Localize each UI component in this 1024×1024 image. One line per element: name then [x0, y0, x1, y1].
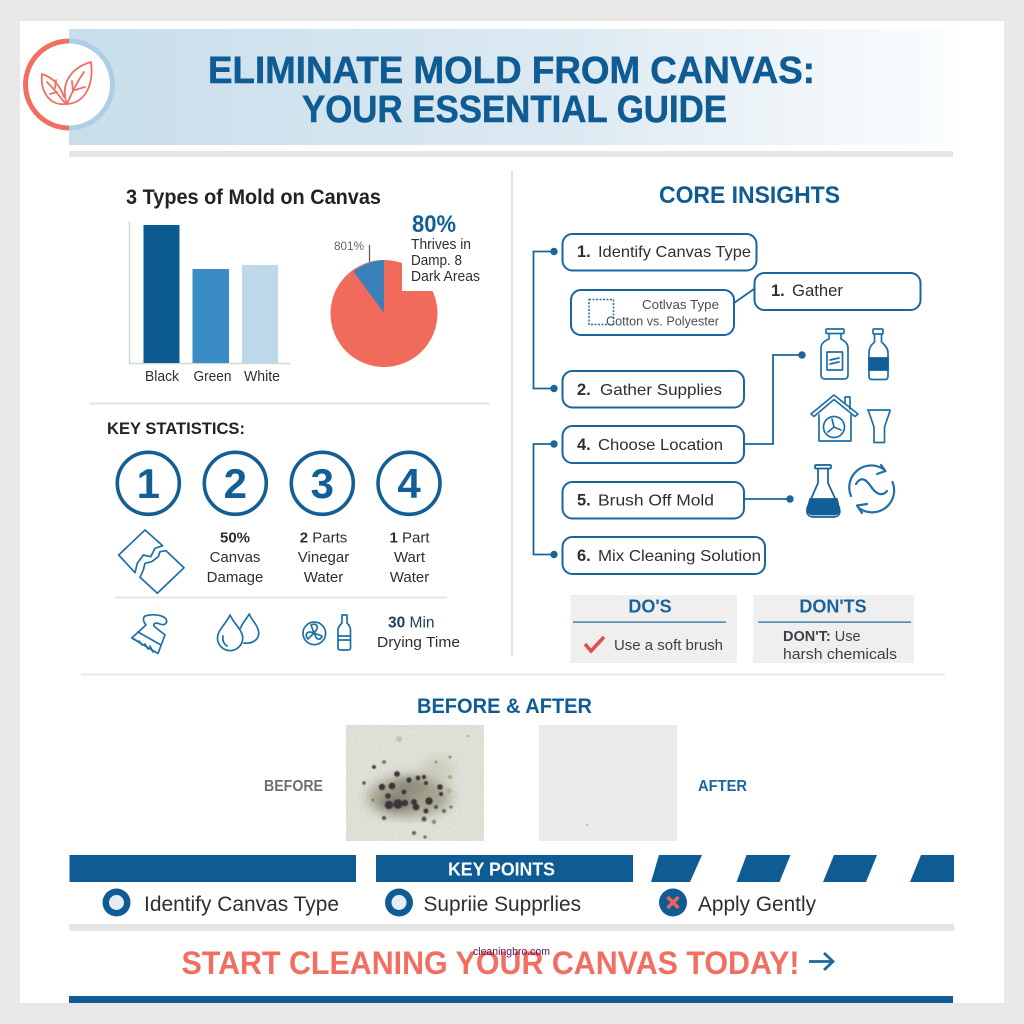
- heading: key statistics: KEY STATISTICS:: [107, 420, 245, 438]
- stat: water: Water: [390, 569, 429, 586]
- pie callout: Damp. 8: [411, 253, 462, 269]
- connector: steps 1 to 2: [534, 249, 557, 391]
- icon: recycle: [849, 465, 894, 513]
- step 2: [562, 371, 744, 408]
- stat: water: Wart: [394, 549, 426, 566]
- step 5: Brush Off Mold: [598, 492, 714, 510]
- stat: vinegar: 2 Parts: [300, 530, 347, 546]
- heading: core insights: CORE INSIGHTS: [659, 182, 840, 209]
- numbered circles: 1: [137, 460, 160, 507]
- step 5: 5.: [577, 492, 591, 510]
- canvas type sub-box: Cotlvas Type: [642, 298, 719, 312]
- key point: identify: Identify Canvas Type: [144, 893, 339, 916]
- stat: canvas damage: 50%: [220, 530, 250, 546]
- pie callout: Thrives in: [411, 237, 471, 253]
- icon: water drops: [218, 614, 259, 651]
- key point: apply gently: [659, 888, 816, 916]
- heading: mold types: 3 Types of Mold on Canvas: [126, 186, 381, 209]
- icon: jar: [821, 329, 848, 379]
- key points banner: [70, 855, 954, 882]
- call to action: START CLEANING YOUR CANVAS TODAY!: [182, 945, 800, 981]
- stat: water: 1 Part: [389, 530, 430, 546]
- stat: vinegar: [298, 530, 349, 586]
- watermark: cleaningbro.com: [473, 946, 550, 958]
- photo: moldy canvas: [346, 725, 484, 841]
- gather box: 1.: [771, 282, 785, 300]
- pie chart: 801%: [334, 241, 364, 253]
- icon: flask: [807, 465, 840, 517]
- stat: drying time: 30 Min: [388, 614, 435, 632]
- title: YOUR ESSENTIAL GUIDE: [302, 89, 727, 131]
- title: [208, 50, 815, 131]
- canvas type sub-box: Cotton vs. Polyester: [606, 314, 719, 328]
- numbered circles: 2: [224, 460, 247, 507]
- icon: bottle: [869, 329, 888, 380]
- step 4: Choose Location: [598, 437, 723, 454]
- key point: identify: [102, 888, 339, 916]
- panel: don'ts: DON'T: Use: [783, 629, 861, 645]
- panel: do's: [570, 595, 737, 663]
- bar chart: Black: [145, 369, 180, 385]
- step 6: 6.: [577, 547, 591, 565]
- bar chart: [130, 222, 290, 385]
- numbered circles: [117, 452, 440, 514]
- connector: sub-box to gather: [734, 289, 754, 303]
- key point: supplies: [385, 888, 581, 916]
- bottom bar: [69, 996, 953, 1003]
- icon: torn canvas: [119, 530, 184, 593]
- step 1: 1.: [577, 243, 591, 261]
- step 1: [562, 234, 756, 270]
- gather box: [754, 273, 920, 310]
- panel: don'ts: harsh chemicals: [783, 647, 897, 663]
- panel: don'ts: DON'TS: [799, 596, 867, 616]
- label: after: AFTER: [698, 778, 747, 795]
- icon: arrow: [809, 953, 833, 970]
- stat: vinegar: Vinegar: [298, 549, 349, 566]
- step 6: [562, 537, 765, 574]
- stat: vinegar: Water: [304, 569, 343, 586]
- icon: brush: [132, 615, 167, 654]
- step 4: [562, 426, 744, 463]
- connector: brush to flask: [744, 496, 793, 502]
- heading: before and after: BEFORE & AFTER: [417, 695, 592, 718]
- stat: drying time: [377, 614, 460, 651]
- connector: steps 4 to 6: [534, 441, 557, 557]
- icon: funnel: [868, 410, 890, 442]
- step 2: 2.: [577, 381, 591, 399]
- photo: clean canvas: [539, 725, 677, 841]
- bar chart: White: [244, 369, 280, 385]
- icon: leaf logo: [26, 41, 112, 128]
- stat: water: [389, 530, 430, 586]
- numbered circles: 4: [397, 460, 421, 507]
- gather box: Gather: [792, 282, 844, 300]
- key points banner: KEY POINTS: [448, 860, 555, 880]
- icon: fan and bottle: [303, 615, 350, 650]
- pie callout: [411, 211, 480, 285]
- step 1: Identify Canvas Type: [598, 244, 751, 261]
- step 4: 4.: [577, 436, 591, 454]
- title: ELIMINATE MOLD FROM CANVAS:: [208, 50, 815, 92]
- numbered circles: 3: [311, 460, 334, 507]
- step 2: Gather Supplies: [600, 382, 722, 399]
- canvas type sub-box: [571, 290, 734, 335]
- icon: check mark: [585, 637, 604, 651]
- pie callout: Dark Areas: [411, 269, 480, 285]
- header banner: [69, 29, 953, 157]
- connector: location to supplies: [744, 352, 805, 444]
- pie callout: 80%: [412, 211, 456, 238]
- pie chart: [330, 241, 442, 367]
- key point: apply gently: Apply Gently: [698, 893, 816, 916]
- label: before: BEFORE: [264, 778, 323, 795]
- stat: canvas damage: Damage: [207, 569, 263, 586]
- bar chart: Green: [194, 369, 232, 385]
- stat: canvas damage: Canvas: [210, 549, 260, 566]
- panel: do's: DO'S: [628, 596, 672, 616]
- stat: canvas damage: [207, 530, 263, 586]
- key point: supplies: Supriie Supprlies: [424, 893, 581, 916]
- panel: do's: Use a soft brush: [614, 638, 723, 654]
- step 6: Mix Cleaning Solution: [598, 548, 761, 565]
- panel: don'ts: [753, 595, 914, 663]
- icon: house with fan: [811, 395, 858, 441]
- stat: drying time: Drying Time: [377, 634, 460, 651]
- step 5: [562, 482, 744, 518]
